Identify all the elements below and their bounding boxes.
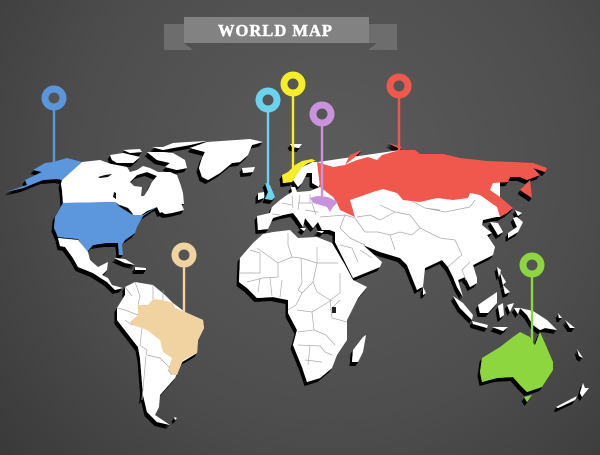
Russia (red) [317,143,547,217]
USA and Alaska [6,158,157,255]
UK (light blue) [265,183,275,200]
New Zealand [556,383,589,408]
title ribbon [164,17,397,50]
Philippines [497,267,510,294]
Burundi lake mark [332,307,336,313]
South America [117,282,204,425]
Ukraine (purple) [310,196,338,212]
Greenland and Iceland [190,139,263,180]
Norway (yellow) [282,159,316,183]
pin: Norway [284,75,302,170]
Sulawesi and eastern islands [498,303,520,318]
North America white [61,141,207,217]
Scandinavia [293,162,322,187]
Falkland islands [174,417,177,420]
pin: Ukraine [313,105,331,197]
Caribbean islands [114,258,146,270]
pin: UK [259,91,277,186]
Eurasia [257,150,503,297]
Java [472,321,508,331]
Japan [508,210,523,238]
title text: WORLD MAP [218,21,332,40]
Brazil [130,299,204,375]
Madagascar [352,335,366,362]
Sumatra [453,296,473,320]
Svalbard [290,144,302,148]
pin: Brazil [175,246,193,313]
Korea [490,222,503,235]
pin: USA [45,89,63,162]
Africa [239,230,367,382]
lakes [98,174,133,217]
world map land masses [6,139,589,425]
pin: Australia [523,256,541,345]
New Guinea [520,308,557,330]
Sri Lanka [423,287,426,295]
Borneo [478,292,497,313]
pin: Russia [390,77,408,151]
Australia (green) [480,332,553,392]
Tasmania [524,395,532,402]
Pacific islands [558,313,583,358]
Mediterranean islands [300,228,324,233]
Ireland [258,192,264,200]
Mexico and Central America [58,238,123,290]
